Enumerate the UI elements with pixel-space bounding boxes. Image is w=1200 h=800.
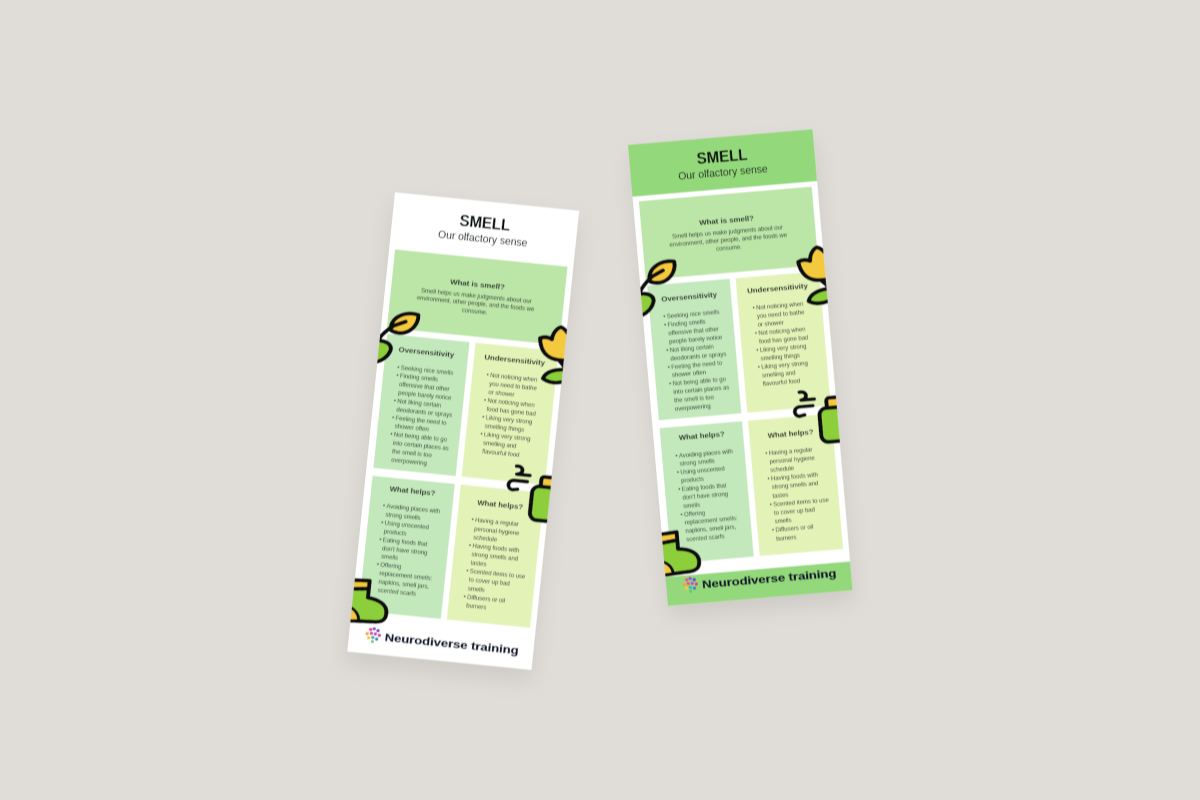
list: Seeking nice smells [667, 310, 720, 321]
panel: what helps, undersensitivity [748, 414, 843, 556]
card: green leaflet [624, 128, 863, 606]
list: Not noticing when [758, 327, 806, 337]
icon: sock [658, 530, 700, 575]
list: the smell is too [392, 449, 433, 459]
description: environment, other people, and the foods we [416, 296, 535, 313]
list: • [376, 562, 379, 569]
list: Not noticing when [487, 399, 535, 409]
list: strong smells [680, 459, 715, 468]
list: Liking very strong [760, 344, 807, 354]
list: schedule [473, 535, 498, 544]
list: • [381, 521, 384, 527]
footer band [665, 561, 853, 606]
list: • [482, 415, 485, 421]
list: strong smells and [471, 552, 518, 563]
heading: What helps? [389, 484, 436, 498]
list: offensive that other [399, 382, 450, 393]
list: replacement smells: [379, 571, 433, 582]
list: smells [683, 503, 701, 510]
logo mark [682, 576, 699, 593]
heading: What helps? [679, 429, 725, 442]
list: Not noticing when [490, 373, 538, 384]
list: offensive that other [668, 327, 719, 337]
card background [347, 192, 579, 670]
list: • [680, 512, 683, 519]
list: • [767, 477, 770, 483]
logo mark [365, 626, 382, 644]
list: • [675, 454, 678, 460]
list: Feeling the need to [671, 361, 723, 371]
list: or shower [488, 390, 515, 399]
list: strong smells [385, 513, 421, 522]
panel: what helps, oversensitivity [359, 476, 455, 619]
list: • [677, 471, 679, 477]
list: shower often [672, 370, 706, 379]
list: • [765, 451, 768, 457]
list: • [471, 518, 474, 524]
list: • [663, 315, 666, 321]
subtitle: Our olfactory sense [438, 229, 528, 250]
list: replacement smells: [685, 516, 738, 527]
list: Not being able to go [673, 377, 727, 388]
icon: smell wind [793, 391, 815, 417]
list: don't have strong [682, 492, 728, 502]
list: Scented items to use [469, 569, 526, 581]
header band [628, 129, 817, 197]
list: personal hygiene [769, 456, 816, 466]
title: SMELL [459, 211, 511, 235]
list: people barely notice [669, 335, 723, 346]
list: • [666, 348, 669, 354]
icon: tulip [538, 324, 568, 386]
panel: undersensitivity [736, 271, 831, 413]
logo [682, 564, 837, 593]
heading: Undersensitivity [747, 281, 809, 295]
list: • [383, 504, 385, 510]
list: products [383, 529, 407, 538]
list: Having foods with [472, 544, 520, 554]
card: white leaflet [343, 192, 589, 671]
list: overpowering [391, 458, 427, 467]
list: burners [776, 535, 797, 543]
list: • [396, 374, 399, 380]
list: you need to bathe [489, 382, 538, 392]
panel: what is smell [639, 187, 818, 280]
description: environment, other people, and the foods we [669, 233, 788, 249]
list: • [379, 537, 382, 543]
list: • [669, 382, 672, 388]
list: scented scarfs [377, 588, 416, 598]
heading: Undersensitivity [484, 353, 546, 368]
description: consume. [461, 308, 488, 317]
icon: smell wind [508, 465, 531, 491]
list: Not liking certain [670, 344, 714, 354]
list: Not being able to go [393, 432, 448, 444]
list: Diffusers or oil [467, 595, 505, 605]
list: smells [468, 586, 485, 594]
list: food has gone bad [759, 335, 809, 345]
card background [628, 129, 853, 606]
list: shower often [394, 424, 429, 434]
heading: What is smell? [450, 277, 506, 291]
description: Smell helps us make judgments about our [421, 288, 532, 305]
icon: tulip [797, 246, 833, 305]
list: napkins, smell jars, [685, 525, 737, 535]
list: • [668, 365, 670, 371]
list: • [753, 306, 755, 312]
list: Liking very strong [485, 415, 532, 426]
list: schedule [770, 466, 795, 474]
list: • [755, 331, 757, 337]
list: smelling and [483, 441, 517, 450]
list: deodorants or sprays [670, 352, 727, 363]
list: Not liking certain [397, 399, 441, 409]
list: • [392, 415, 394, 422]
list: into certain places as [393, 441, 449, 452]
list: smells [775, 518, 792, 525]
list: don't have strong [382, 546, 428, 557]
list: Having foods with [771, 473, 818, 483]
heading: Oversensitivity [398, 345, 455, 360]
list: Liking very strong [484, 432, 531, 443]
list: • [678, 487, 681, 493]
list: Not noticing when [756, 302, 804, 312]
list: napkins, smell jars, [378, 580, 430, 591]
shadow: left card [345, 202, 579, 682]
list: Finding smells [400, 374, 438, 384]
list: Diffusers or oil [775, 525, 814, 534]
list: smelling and [762, 371, 796, 379]
list: the smell is too [674, 395, 715, 404]
list: • [466, 569, 469, 575]
panel: oversensitivity [373, 334, 470, 476]
heading: What helps? [767, 427, 814, 440]
list: deodorants or sprays [396, 407, 452, 419]
list: • [463, 595, 466, 601]
list: overpowering [675, 404, 711, 413]
icon: bottle [528, 474, 552, 524]
list: or shower [757, 320, 784, 329]
list: to cover up bad [774, 507, 815, 517]
shadow: right card [630, 140, 854, 618]
icon: plant [634, 261, 679, 317]
logo [365, 626, 520, 657]
list: scented scarfs [686, 534, 725, 544]
list: food has gone bad [486, 407, 536, 418]
list: Having a regular [769, 447, 813, 457]
list: • [469, 543, 471, 550]
list: Using unscented [384, 521, 429, 531]
list: Avoiding places with [679, 449, 733, 460]
list: people barely notice [398, 391, 452, 402]
logo text: Neurodiverse training [384, 632, 519, 657]
list: Having a regular [475, 518, 519, 528]
panel: undersensitivity [462, 343, 559, 485]
description: Smell helps us make judgments about our [672, 225, 783, 241]
list: Offering [684, 511, 705, 518]
list: • [397, 365, 400, 371]
panel: what helps, undersensitivity [447, 485, 544, 628]
panel: oversensitivity [647, 279, 741, 420]
list: tastes [470, 561, 487, 568]
heading: What is smell? [699, 214, 755, 227]
list: Eating foods that [383, 538, 428, 548]
list: flavourful food [763, 379, 800, 388]
list: • [486, 373, 489, 379]
list: flavourful food [482, 449, 520, 459]
description: consume. [716, 245, 742, 253]
panel: what is smell [387, 249, 567, 345]
list: you need to bathe [757, 310, 805, 320]
list: Finding smells [667, 320, 706, 329]
list: Liking very strong [761, 361, 808, 371]
list: • [393, 399, 396, 405]
list: • [758, 365, 760, 371]
list: • [770, 503, 772, 509]
list: strong smells and [772, 481, 819, 491]
list: Scented items to use [773, 498, 830, 508]
list: Avoiding places with [386, 504, 440, 516]
panel: what helps, oversensitivity [660, 421, 754, 564]
icon: bottle [818, 396, 850, 442]
list: • [390, 432, 393, 438]
icon: sock [347, 579, 390, 624]
list: burners [466, 603, 487, 611]
list: Using unscented [680, 467, 725, 476]
list: products [681, 477, 704, 485]
list: • [484, 398, 486, 404]
logo text: Neurodiverse training [702, 568, 837, 592]
list: smells [381, 554, 398, 562]
title: SMELL [696, 145, 748, 168]
list: personal hygiene [474, 527, 520, 537]
subtitle: Our olfactory sense [678, 163, 768, 183]
list: Eating foods that [682, 483, 727, 493]
list: • [756, 348, 759, 354]
list: • [480, 432, 483, 438]
list: smelling things [484, 424, 524, 434]
list: Feeling the need to [395, 416, 447, 427]
list: tastes [772, 492, 789, 500]
icon: plant [373, 310, 419, 367]
heading: Oversensitivity [661, 290, 718, 304]
list: Seeking nice smells [400, 366, 453, 377]
list: to cover up bad [468, 578, 510, 588]
list: • [664, 323, 667, 329]
list: smelling things [760, 353, 800, 362]
list: into certain places as [673, 385, 730, 396]
list: • [772, 528, 774, 534]
heading: What helps? [477, 498, 524, 512]
list: Offering [380, 563, 402, 571]
